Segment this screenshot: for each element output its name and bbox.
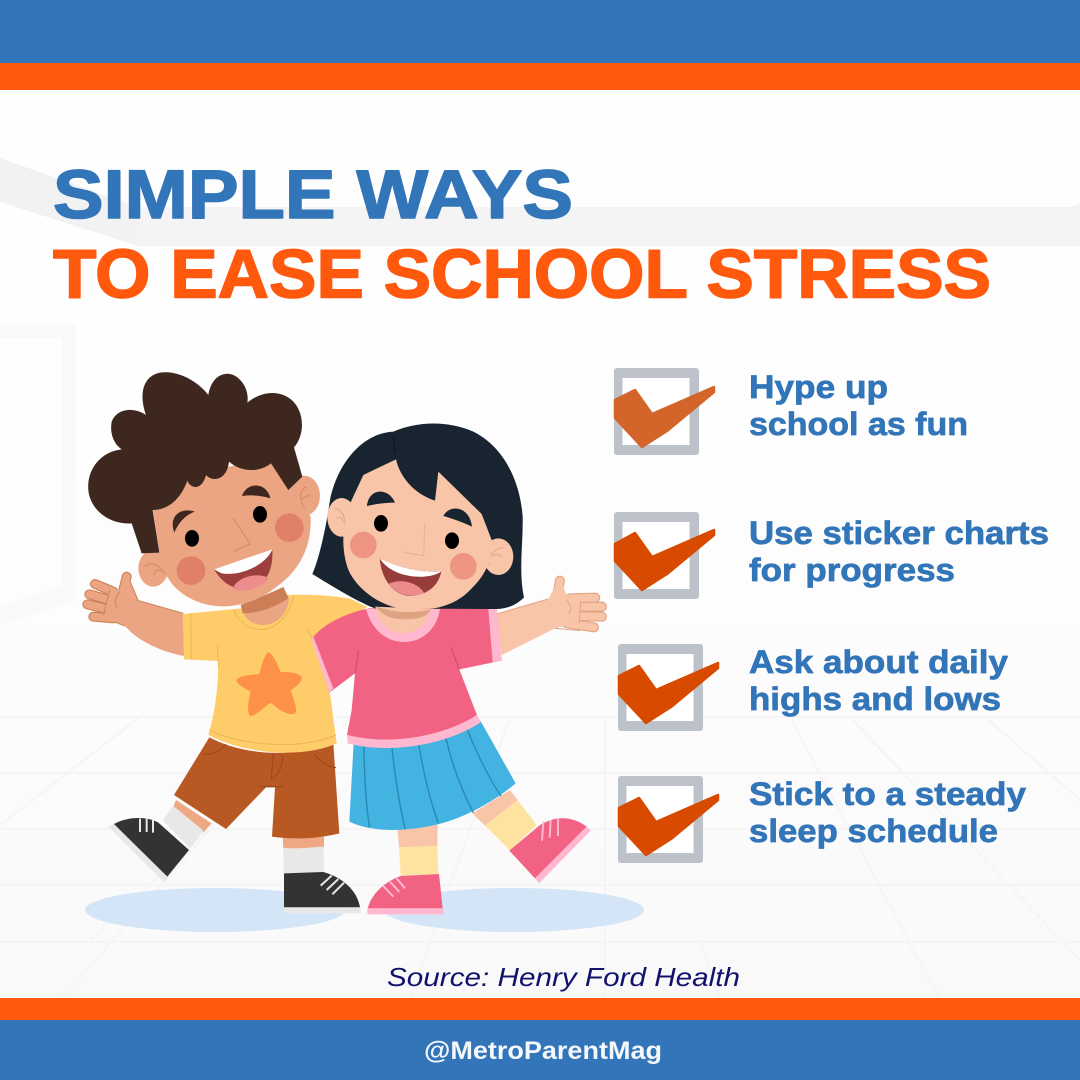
shirt hem (347, 715, 481, 748)
title (53, 156, 991, 312)
item: sticker charts: for progress (749, 552, 955, 588)
girl: pink shirt (312, 606, 502, 748)
footer band: @MetroParentMag (424, 1037, 662, 1065)
item: daily highs and lows (618, 644, 1008, 731)
item: sticker charts: Use sticker charts (749, 515, 1049, 551)
boy: yellow shirt with star (183, 595, 370, 753)
boy: shorts and shoes (108, 737, 361, 913)
item: daily highs and lows: Ask about daily (749, 644, 1008, 680)
item: hype up school: Hype up (749, 369, 888, 405)
item: hype up school: school as fun (749, 406, 968, 442)
illustration: two happy children (85, 372, 644, 932)
footer band (0, 998, 1080, 1080)
source credit: Source: Henry Ford Health (387, 962, 740, 992)
item: sticker charts (614, 512, 1049, 599)
boy: head (88, 372, 320, 625)
title: SIMPLE WAYS (53, 156, 573, 233)
girl: hair, arm and head (312, 424, 602, 655)
boy: arm and hand (87, 575, 184, 656)
top header band (0, 0, 1080, 90)
item: sleep schedule: Stick to a steady (749, 776, 1026, 812)
item: daily highs and lows: highs and lows (749, 681, 1001, 717)
item: sleep schedule: sleep schedule (749, 813, 998, 849)
item: hype up school (614, 368, 968, 455)
ground shadows (85, 888, 644, 932)
item: sleep schedule (618, 776, 1026, 863)
girl: legs, skirt and shoes (349, 720, 591, 914)
checklist (614, 368, 1049, 863)
title: TO EASE SCHOOL STRESS (53, 236, 991, 312)
shirt star (236, 653, 302, 716)
